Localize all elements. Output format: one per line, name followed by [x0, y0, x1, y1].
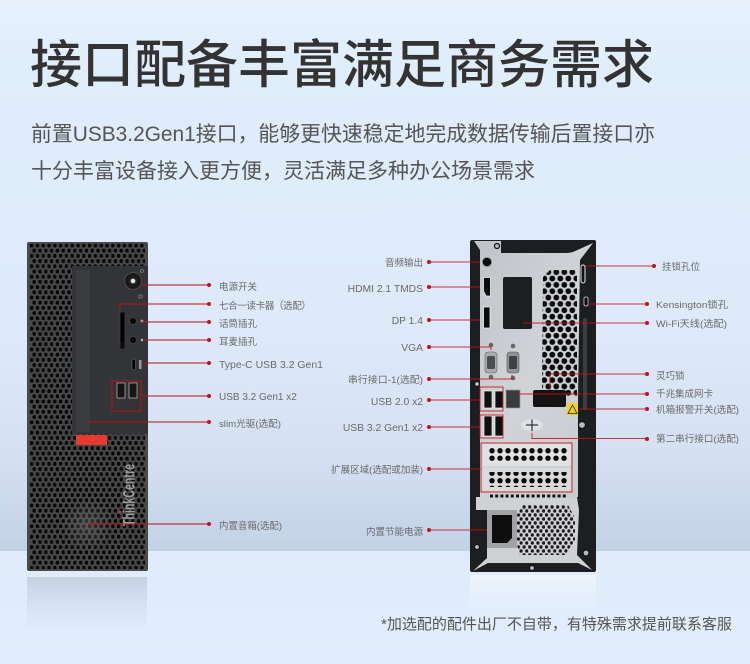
right vent honeycomb — [542, 270, 577, 396]
screws — [474, 244, 589, 570]
description text — [31, 123, 655, 183]
front callout lines — [88, 285, 209, 524]
rear left labels: 音频输出 — [385, 257, 423, 269]
rear left labels: USB 2.0 x2 — [371, 397, 423, 408]
rear tower reflection — [470, 575, 596, 620]
description text: 前置USB3.2Gen1接口，能够更快速稳定地完成数据传输后置接口亦 — [31, 123, 655, 146]
rear right labels — [656, 261, 739, 445]
rear right labels: 千兆集成网卡 — [656, 388, 714, 400]
optical drive bay — [76, 270, 90, 432]
serial port — [507, 344, 519, 380]
bottom black strip — [478, 563, 590, 570]
side slot — [583, 318, 587, 410]
padlock hole — [581, 265, 585, 283]
rear left labels: 扩展区域(选配或加装) — [331, 464, 423, 476]
front USB ports — [117, 383, 137, 398]
power socket — [487, 510, 517, 548]
rear view of the tower — [470, 240, 596, 572]
front labels: 话筒插孔 — [219, 318, 258, 330]
rear right labels: 机箱报警开关(选配) — [656, 404, 739, 416]
audio output jack — [482, 258, 492, 266]
rear left labels: VGA — [401, 343, 423, 354]
power button — [124, 270, 144, 298]
HDMI port — [484, 278, 490, 296]
DP port — [484, 307, 490, 328]
small holes row — [490, 494, 567, 498]
front view of the tower — [27, 242, 148, 571]
smart lock block — [533, 390, 566, 407]
rear callout dots — [427, 260, 656, 532]
front tower reflection — [27, 577, 147, 627]
front labels: 电源开关 — [219, 281, 258, 293]
rear right labels: 第二串行接口(选配) — [656, 433, 739, 445]
red tab — [76, 435, 107, 445]
warning label — [567, 403, 578, 415]
rear right labels: 灵巧锁 — [656, 370, 685, 382]
power supply vent — [517, 505, 575, 555]
description text: 十分丰富设备接入更方便，灵活满足多种办公场景需求 — [31, 160, 535, 183]
rear right labels: Kensington锁孔 — [656, 299, 729, 311]
front labels: USB 3.2 Gen1 x2 — [219, 392, 297, 403]
front labels: slim光驱(选配) — [219, 418, 281, 430]
Ethernet port — [506, 390, 520, 408]
rear left labels: DP 1.4 — [392, 316, 423, 327]
front labels: 耳麦插孔 — [219, 336, 258, 348]
card reader slot — [120, 312, 125, 349]
second serial blank — [521, 419, 543, 431]
rear USB ports — [484, 391, 503, 436]
front callout dots — [207, 283, 211, 526]
speaker grille area — [60, 498, 114, 552]
Kensington slot — [584, 297, 588, 306]
lower power supply plate — [473, 497, 592, 571]
VGA port — [485, 343, 497, 379]
front labels: 七合一读卡器（选配） — [219, 300, 311, 312]
front control panel — [72, 266, 148, 434]
front labels: Type-C USB 3.2 Gen1 — [219, 360, 323, 371]
front labels — [219, 281, 323, 532]
Type-C port — [132, 359, 142, 370]
ThinkCentre logo: ThinkCentre — [120, 464, 138, 526]
Wi-Fi antenna cover — [503, 277, 532, 329]
title: 接口配备丰富满足商务需求 — [30, 37, 654, 95]
rear silver plate — [474, 241, 593, 497]
rear right labels: 挂锁孔位 — [662, 261, 701, 273]
rear left labels: USB 3.2 Gen1 x2 — [343, 423, 423, 434]
rear right labels: Wi-Fi天线(选配) — [656, 318, 727, 330]
rear left labels — [331, 257, 423, 538]
footnote: *加选配的配件出厂不自带，有特殊需求提前联系客服 — [381, 616, 732, 633]
rear left labels: HDMI 2.1 TMDS — [348, 284, 423, 295]
rear callout lines — [429, 262, 654, 530]
audio jacks — [130, 318, 143, 344]
expansion slots — [483, 444, 571, 491]
rear left labels: 内置节能电源 — [366, 526, 423, 538]
rear left labels: 串行接口-1(选配) — [348, 374, 423, 386]
front labels: 内置音箱(选配) — [219, 520, 282, 532]
